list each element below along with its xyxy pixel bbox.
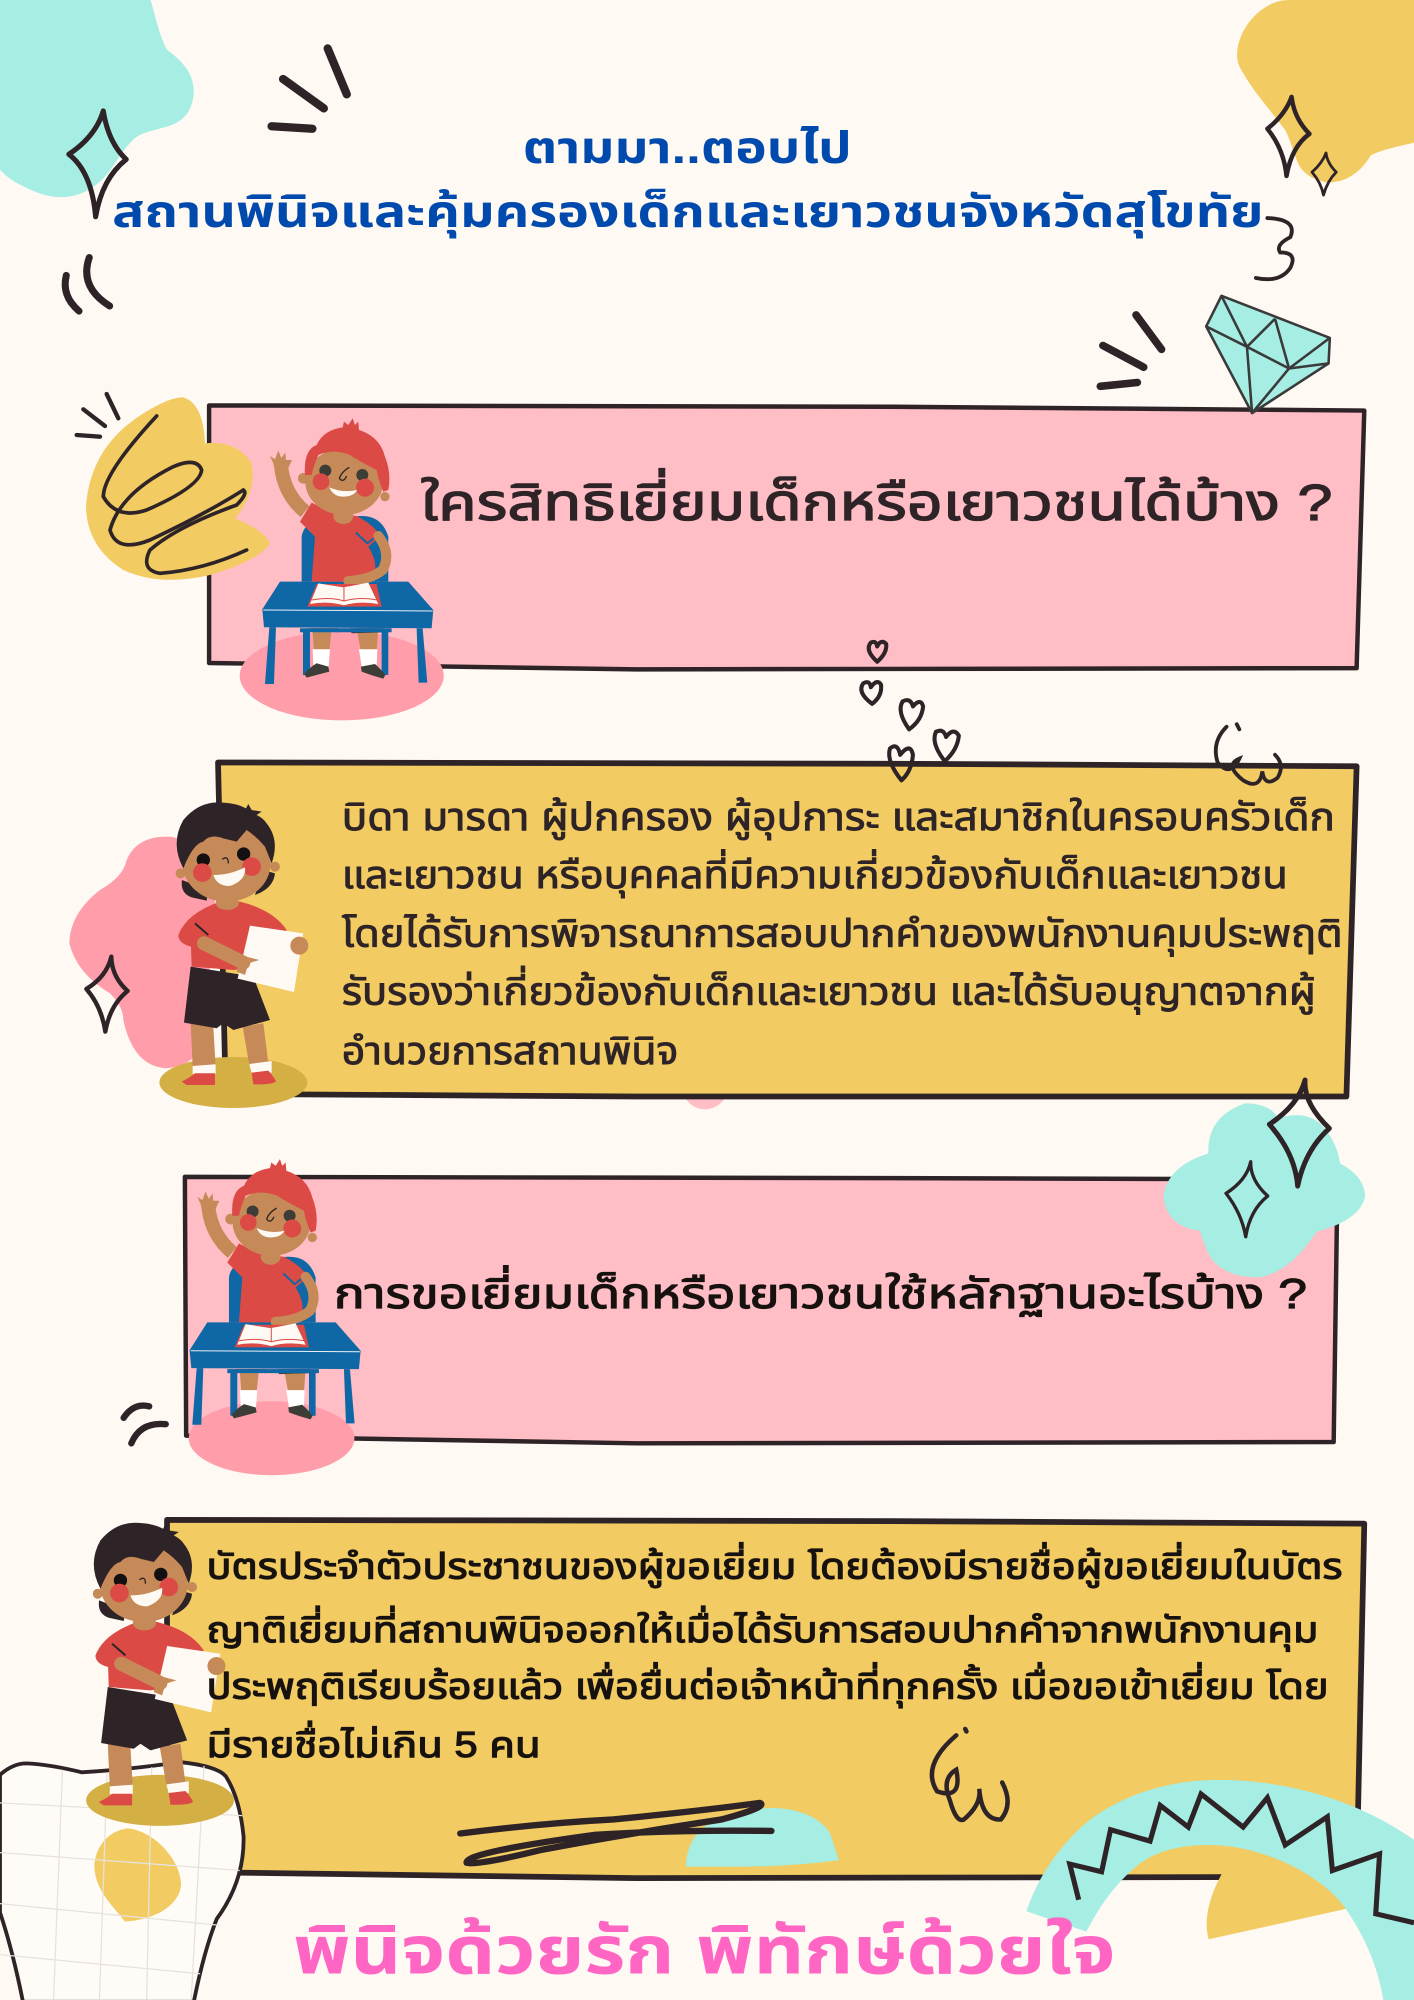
- accent dashes: top: [272, 48, 347, 129]
- scribble: answer two: [460, 1803, 771, 1863]
- blob: grid paper bottom left: [0, 1762, 244, 2000]
- ground ellipse: first student: [240, 631, 444, 720]
- sparkle: top-left: [69, 111, 126, 217]
- sparkle: left of second student: [86, 957, 128, 1032]
- panel background: [218, 762, 1357, 1097]
- sparkle: top-right large: [1267, 97, 1309, 176]
- panel: answer one: [218, 762, 1357, 1097]
- illustration: student raising hand again: [190, 1159, 361, 1425]
- panel: question one: [209, 405, 1364, 669]
- text: evidence answer: ประพฤติเรียบร้อยแล้ว เพื่อยื่นต่อเจ้าหน้าที่ทุกครั้ง เมื่อขอเข้าเยี่ยม โดย: [207, 1661, 1329, 1707]
- slogan: พินิจด้วยรัก พิทักษ์ด้วยใจ: [293, 1915, 1116, 1989]
- blob: top-right yellow: [1237, 0, 1414, 182]
- illustration: student raising hand: [262, 418, 433, 684]
- accent dashes: near diamond: [1100, 315, 1162, 386]
- text: who may visit answer: โดยได้รับการพิจารณาการสอบปากคำของพนักงานคุมประพฤติ: [342, 913, 1343, 957]
- blob: top-left teal: [0, 0, 194, 197]
- title: สถานพินิจและคุ้มครองเด็กและเยาวชนจังหวัดสุโขทัย: [112, 188, 1264, 239]
- sparkle: top-right small: [1312, 153, 1336, 195]
- small pink peek under panel: [682, 1063, 728, 1109]
- shape: teal arch: [1026, 1780, 1414, 2000]
- curl: inside answer two: [932, 1729, 1008, 1820]
- text: who may visit answer: บิดา มารดา ผู้ปกครอง ผู้อุปการะ และสมาชิกในครอบครัวเด็ก: [342, 796, 1335, 840]
- title: [112, 124, 1264, 239]
- heading: evidence required: การขอเยี่ยมเด็กหรือเยาวชนใช้หลักฐานอะไรบ้าง ?: [334, 1265, 1307, 1317]
- zigzag on arch: [1070, 1794, 1414, 1923]
- accent curves: lower left of question two: [124, 1406, 166, 1443]
- text: who may visit answer: [342, 796, 1343, 1073]
- blob and scribble: yellow: [77, 394, 270, 580]
- accent curves: left of title: [65, 258, 110, 311]
- icon: diamond: [1206, 296, 1330, 413]
- text: who may visit answer: อำนวยการสถานพินิจ: [342, 1030, 678, 1073]
- blob: pink behind second student: [69, 837, 217, 1068]
- ground ellipse: second student: [159, 1057, 307, 1108]
- yellow spot: [94, 1828, 181, 1921]
- panel: question two: [185, 1177, 1337, 1443]
- text: who may visit answer: รับรองว่าเกี่ยวข้องกับเด็กและเยาวชน และได้รับอนุญาตจากผู้: [342, 966, 1316, 1015]
- text: evidence answer: บัตรประจำตัวประชาชนของผู้ขอเยี่ยม โดยต้องมีรายชื่อผู้ขอเยี่ยมในบัตร: [207, 1541, 1343, 1587]
- panel: answer two: [167, 1520, 1364, 1878]
- blob: small teal in answer two: [686, 1808, 839, 1867]
- panel background: [209, 405, 1364, 669]
- illustration: student with paper: [176, 802, 308, 1085]
- ground ellipse: third student: [189, 1401, 354, 1475]
- shape: yellow under arch: [1207, 1836, 1346, 1939]
- text: evidence answer: มีรายชื่อไม่เกิน 5 คน: [207, 1720, 541, 1765]
- curl: top of answer one: [1216, 724, 1281, 784]
- blob and sparkles: teal: [1163, 1080, 1365, 1277]
- ground ellipse: fourth student: [86, 1775, 234, 1826]
- curl: beside title: [1256, 218, 1293, 279]
- panel background: [185, 1177, 1337, 1443]
- text: evidence answer: [207, 1541, 1343, 1765]
- heading: who may visit: ใครสิทธิเยี่ยมเด็กหรือเยาวชนได้บ้าง ?: [421, 468, 1332, 531]
- text: evidence answer: ญาติเยี่ยมที่สถานพินิจออกให้เมื่อได้รับการสอบปากคำจากพนักงานคุม: [207, 1605, 1318, 1651]
- text: who may visit answer: และเยาวชน หรือบุคคลที่มีความเกี่ยวข้องกับเด็กและเยาวชน: [342, 849, 1288, 898]
- illustration: student with paper again: [93, 1523, 225, 1805]
- hearts: [861, 642, 959, 780]
- title: ตามมา..ตอบไป: [523, 124, 852, 173]
